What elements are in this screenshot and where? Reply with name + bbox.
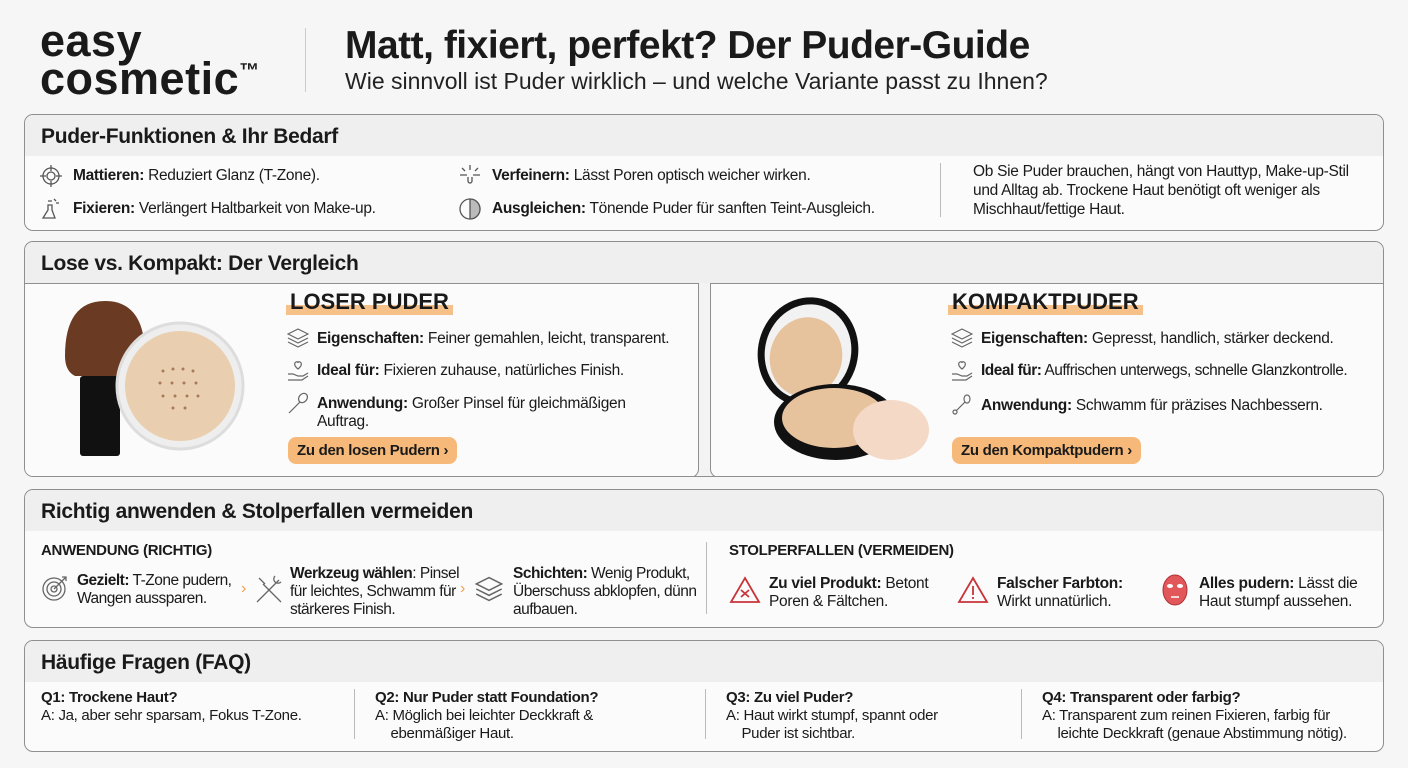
text: farbton: Wirkt unnatürlich.	[997, 593, 1111, 610]
text: alles pudern: Alles pudern: Lässt die	[1199, 575, 1358, 592]
text: alles pudern: Haut stumpf aussehen.	[1199, 593, 1352, 610]
panel: FAQ: Häufige Fragen (FAQ)	[41, 651, 251, 674]
text: schichten: Schichten: Wenig Produkt, Überschuss abklopfen, dünn aufbauen.	[513, 565, 696, 618]
text: zu viel: Zu viel Produkt: Betont	[769, 575, 928, 592]
text: farbton	[997, 575, 1123, 610]
faq 3: A: Haut wirkt stumpf, spannt oder	[726, 707, 938, 724]
text: mattieren: Mattieren: Reduziert Glanz (T-Zone).	[73, 167, 320, 184]
subtitle: Wie sinnvoll ist Puder wirklich – und welche Variante passt zu Ihnen?	[345, 68, 1048, 94]
faq 3	[726, 689, 938, 742]
icon: sparkle	[460, 165, 480, 184]
text: anwendung: Anwendung: Großer Pinsel für gleichmäßigen Auftrag.	[317, 395, 626, 430]
faq 2: A: Möglich bei leichter Deckkraft &	[375, 707, 593, 724]
logo: cosmetic™	[40, 53, 260, 104]
text: zu viel	[769, 575, 929, 610]
panel: anwenden: ›	[460, 580, 465, 597]
icon: layers	[287, 328, 309, 348]
heading: anwendung: ANWENDUNG (RICHTIG)	[41, 542, 212, 559]
button: lose puder	[288, 437, 457, 464]
text: werkzeug: Werkzeug wählen: Pinsel für leichtes, Schwamm für stärkeres Finish.	[290, 565, 459, 618]
text: verfeinern: Verfeinern: Lässt Poren optisch weicher wirken.	[492, 167, 810, 184]
faq 3: Q3: Zu viel Puder?	[726, 689, 853, 706]
icon: face mask	[1162, 574, 1188, 606]
icon: warning x	[730, 576, 760, 603]
icon: hand heart	[288, 361, 308, 381]
panel: Puder-Funktionen: Puder-Funktionen & Ihr Bedarf	[41, 125, 338, 148]
icon: spray	[42, 198, 59, 219]
image: brush and loose powder	[65, 301, 244, 456]
text: farbton: Falscher Farbton:	[997, 575, 1123, 592]
icon: target	[40, 165, 62, 187]
text: alles pudern	[1199, 575, 1358, 610]
icon: half circle	[459, 198, 481, 220]
icon: tools	[256, 576, 282, 602]
faq 4: A: Transparent zum reinen Fixieren, farbig für	[1042, 707, 1330, 724]
text: eigenschaften: Eigenschaften: Gepresst, handlich, stärker deckend.	[981, 330, 1334, 347]
panel: anwenden: ›	[241, 580, 246, 597]
panel: anwenden: Richtig anwenden & Stolperfallen vermeiden	[41, 500, 473, 523]
icon: layers	[475, 576, 503, 602]
panel: Vergleich	[24, 241, 1384, 477]
text: ideal: Ideal für: Auffrischen unterwegs, schnelle Glanzkontrolle.	[981, 362, 1347, 379]
button: lose puder: Zu den losen Pudern ›	[297, 442, 448, 459]
heading: kompaktpuder: KOMPAKTPUDER	[952, 289, 1139, 314]
faq 4: Q4: Transparent oder farbig?	[1042, 689, 1240, 706]
title: Matt, fixiert, perfekt? Der Puder-Guide	[345, 24, 1030, 67]
panel: Vergleich: Lose vs. Kompakt: Der Vergleich	[41, 252, 358, 275]
heading: stolperfallen: STOLPERFALLEN (VERMEIDEN)	[729, 542, 954, 559]
image: compact powder	[758, 297, 929, 460]
logo: easy	[40, 15, 142, 66]
icon: brush	[288, 392, 308, 414]
subpanel: kompaktpuder	[710, 283, 1385, 478]
panel: FAQ	[24, 640, 1384, 752]
heading: loser puder: LOSER PUDER	[290, 289, 449, 314]
faq 2	[375, 689, 598, 742]
icon: layers	[951, 328, 973, 348]
faq 4: leichte Deckkraft (genaue Abstimmung nötig).	[1057, 725, 1347, 742]
text: eigenschaften: Eigenschaften: Feiner gemahlen, leicht, transparent.	[317, 330, 669, 347]
icon: warning	[958, 576, 988, 603]
faq 1: Q1: Trockene Haut?	[41, 689, 177, 706]
text: anwendung: Anwendung: Schwamm für präzises Nachbessern.	[981, 397, 1323, 414]
panel: anwenden	[24, 489, 1384, 628]
button: kompaktpuder	[952, 437, 1141, 464]
button: kompaktpuder: Zu den Kompaktpudern ›	[961, 442, 1132, 459]
faq 3: Puder ist sichtbar.	[741, 725, 855, 742]
text: zu viel: Poren & Fältchen.	[769, 593, 888, 610]
logo	[40, 15, 260, 104]
text: ideal: Ideal für: Fixieren zuhause, natürliches Finish.	[317, 362, 624, 379]
text: gezielt: Gezielt: T-Zone pudern, Wangen aussparen.	[77, 572, 232, 607]
text: bedarf: Ob Sie Puder brauchen, hängt von Hauttyp, Make-up-Stil und Alltag ab. Trockene Haut benötigt oft weniger als Mischhaut/fettige Haut.	[973, 163, 1349, 218]
faq 2: ebenmäßiger Haut.	[390, 725, 514, 742]
faq 2: Q2: Nur Puder statt Foundation?	[375, 689, 598, 706]
text: ausgleichen: Ausgleichen: Tönende Puder für sanften Teint-Ausgleich.	[492, 200, 875, 217]
icon: target	[42, 576, 67, 601]
faq 4	[1042, 689, 1347, 742]
icon: sponge	[952, 394, 971, 415]
subpanel: loser puder	[24, 283, 699, 478]
icon: hand heart	[952, 361, 972, 381]
panel: Puder-Funktionen	[24, 114, 1384, 231]
faq 1	[41, 689, 302, 724]
faq 1: A: Ja, aber sehr sparsam, Fokus T-Zone.	[41, 707, 302, 724]
text: fixieren: Fixieren: Verlängert Haltbarkeit von Make-up.	[73, 200, 376, 217]
